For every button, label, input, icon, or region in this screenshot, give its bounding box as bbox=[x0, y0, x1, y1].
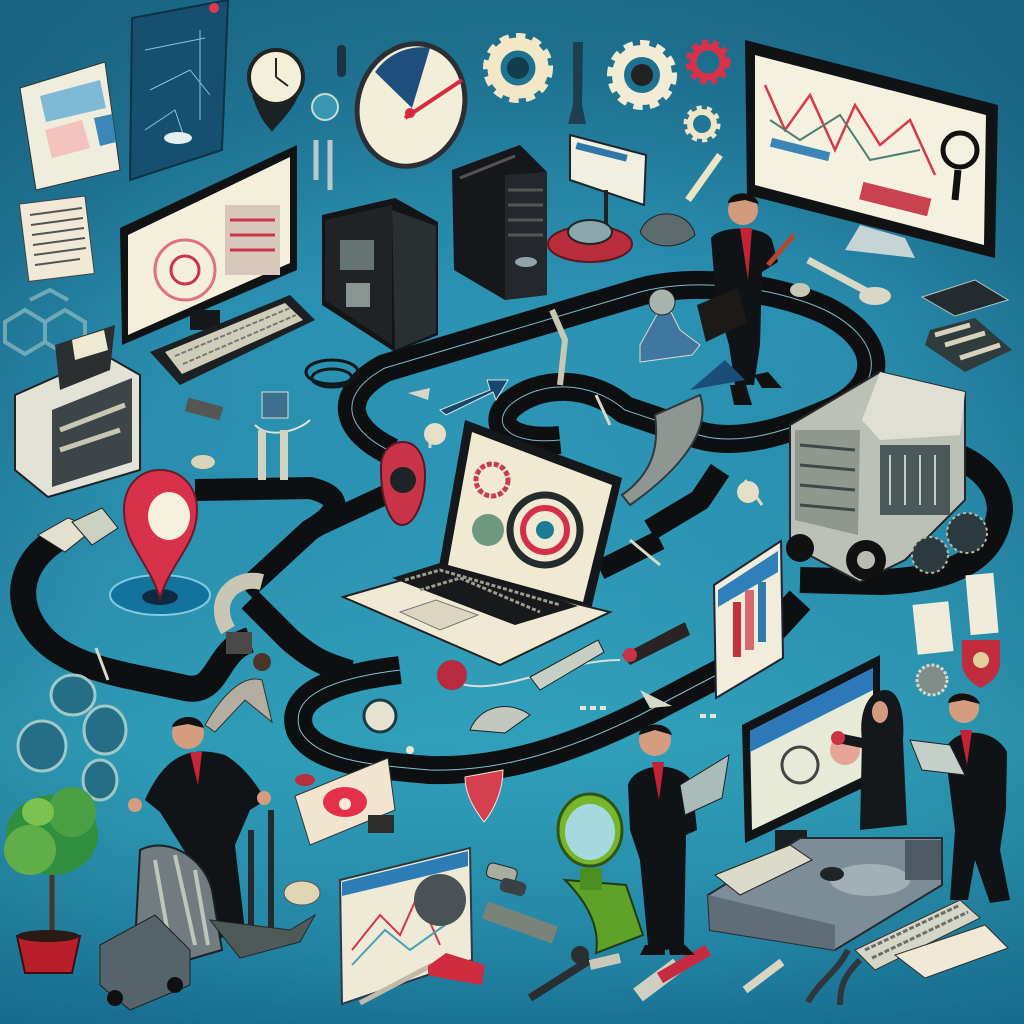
green magnifier bbox=[558, 794, 643, 953]
tangled wire balls bbox=[912, 513, 987, 573]
man with rolling case bbox=[128, 717, 274, 940]
red card bbox=[295, 758, 395, 845]
gear icons bbox=[487, 37, 728, 140]
small device on cable bbox=[185, 392, 310, 480]
monitor: top right chart bbox=[745, 40, 998, 258]
signboard and cable spool bbox=[548, 135, 646, 262]
road clamps bbox=[96, 395, 762, 680]
small documents right bbox=[912, 573, 1000, 695]
monitor: left radar screen bbox=[120, 145, 297, 345]
keyboard bbox=[150, 295, 315, 385]
plane model and disc bbox=[210, 881, 320, 958]
wall chart document bbox=[714, 541, 783, 698]
man: top with briefcase bbox=[697, 193, 794, 405]
document: text page bbox=[19, 196, 94, 281]
tool cluster top bbox=[640, 155, 720, 246]
potted plant bbox=[4, 787, 98, 973]
lower line chart panel bbox=[340, 848, 472, 1004]
red lock badge bbox=[381, 442, 425, 525]
red device bbox=[295, 774, 315, 786]
road arrows bbox=[408, 380, 672, 708]
icon: map pin clock bbox=[249, 50, 303, 132]
paper and keyboard bottom right bbox=[855, 900, 1008, 978]
curved pipe bbox=[222, 581, 262, 654]
desktop computer case bbox=[322, 198, 438, 352]
large gauge clock bbox=[341, 30, 481, 180]
open server box bbox=[15, 325, 140, 497]
blueprint panel bbox=[130, 0, 228, 180]
monitor: lower right bbox=[742, 655, 880, 855]
red hammer bbox=[360, 953, 485, 1003]
truck machine bbox=[786, 372, 965, 582]
man standing right bbox=[910, 693, 1010, 903]
connectors and cables on lower road bbox=[364, 622, 720, 754]
map location pin bbox=[110, 470, 210, 615]
tower server bbox=[452, 145, 547, 300]
rolling luggage cart bbox=[100, 846, 222, 1010]
parts cluster lower bbox=[485, 862, 589, 964]
coin icons bottom left bbox=[18, 675, 126, 800]
tools bottom bbox=[530, 950, 860, 1005]
small lock icons bbox=[312, 45, 346, 190]
icon: nail bbox=[568, 42, 586, 124]
document: top left form bbox=[20, 62, 120, 190]
shield pick bbox=[465, 770, 503, 822]
laptop bbox=[343, 420, 622, 665]
crouching worker bbox=[205, 653, 272, 732]
clamp tools on road bbox=[552, 289, 745, 390]
bracket arm bbox=[622, 395, 703, 505]
wrench and tools right bbox=[790, 260, 1012, 372]
man with tablet bbox=[628, 724, 729, 955]
hexagon network bbox=[5, 290, 85, 354]
hooded figure bbox=[831, 690, 907, 830]
cable coil bbox=[306, 360, 358, 387]
road: central winding track bbox=[23, 285, 1000, 770]
open book bbox=[38, 508, 118, 552]
printer machine bbox=[708, 838, 942, 950]
